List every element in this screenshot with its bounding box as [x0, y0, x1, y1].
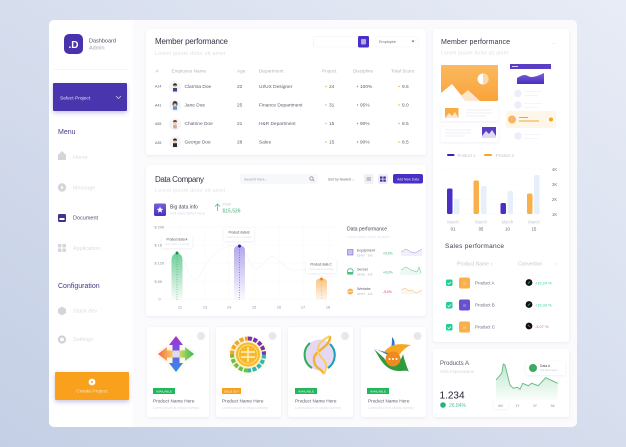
- panel: right column overview: [433, 29, 569, 342]
- menu item: application: [58, 244, 100, 252]
- sort control: Sort by Newest ⌄: [328, 178, 355, 182]
- x axis labels: 13: [203, 306, 207, 310]
- product text: Lorem Ipsum is simply dummy: [295, 406, 341, 410]
- product text: Product Name Here: [222, 398, 264, 404]
- legend: [447, 153, 515, 158]
- y axis labels: $ 20K: [154, 226, 165, 230]
- search input and button: [314, 36, 369, 48]
- big data info: Big data info: [170, 204, 198, 210]
- legend: Product 1: [458, 153, 476, 158]
- brand text: Dashboard: [89, 38, 116, 44]
- product card 4: [361, 327, 426, 417]
- table row: George Doe: George Doe: [184, 140, 211, 146]
- x axis labels: 14: [227, 306, 231, 310]
- sales row: product C: [446, 322, 549, 332]
- value axis: 2K: [552, 197, 557, 202]
- table header: Employee Name: [172, 68, 207, 74]
- heading: menu: Menu: [58, 129, 76, 136]
- bar chart: [443, 167, 557, 232]
- tooltip: product data C: [306, 260, 336, 273]
- x axis labels: [178, 306, 330, 310]
- date labels: 05: [479, 226, 484, 232]
- table row: Jane Doe: 9.0: [402, 102, 409, 108]
- row: website: -5,0%: [383, 290, 392, 294]
- table row: George Doe: 28: [237, 140, 243, 146]
- illustration: list avatars: [514, 90, 542, 140]
- table row: Clarrisa Doe: 24: [329, 84, 335, 90]
- profit stat: $15,526: [222, 209, 241, 215]
- tooltip: product data B: [224, 228, 254, 241]
- table row: Chatrine Doe: 8.5: [402, 121, 409, 127]
- product text: Product Name Here: [153, 398, 195, 404]
- sales row: product C: Product C: [475, 324, 496, 329]
- date labels: March: [475, 220, 487, 224]
- menu item: message: Message: [73, 186, 95, 192]
- table header: Discipline: [353, 68, 373, 74]
- table row: Jane Doe: 95%: [360, 102, 370, 108]
- table row: Clarrisa Doe: UI/UX Designer: [259, 84, 293, 90]
- icon: logo: [64, 34, 83, 54]
- table row: George Doe: 90%: [360, 140, 370, 146]
- row: website: [347, 287, 422, 296]
- tooltip: product data B: Product data B: [228, 230, 250, 234]
- table header: Project: [322, 68, 337, 74]
- y axis labels: $ 8K: [154, 280, 163, 284]
- table row: Chatrine Doe: 15: [329, 121, 335, 127]
- data performance list: [347, 226, 422, 296]
- product text: Lorem Ipsum is simply dummy: [222, 406, 268, 410]
- employee dropdown: Employee: [379, 40, 396, 44]
- sales row: product A: Product A: [475, 281, 495, 286]
- big data info: [154, 204, 205, 216]
- product text: Lorem Ipsum is simply dummy: [368, 406, 414, 410]
- table row: Jane Doe: [155, 100, 409, 112]
- table row: Clarrisa Doe: A14: [155, 84, 161, 88]
- icon: swirl chat: [374, 337, 411, 372]
- date labels: March: [528, 220, 540, 224]
- menu item: home: [58, 151, 88, 161]
- period tabs: [494, 402, 555, 409]
- add new data button: Add New Data: [397, 177, 419, 181]
- table row: Chatrine Doe: [155, 118, 409, 130]
- table row: Clarrisa Doe: [155, 81, 409, 93]
- table row: Jane Doe: Jane Doe: [184, 102, 205, 108]
- subheading: Lorem ipsum dolor sit amet: [155, 188, 225, 194]
- value axis: [552, 167, 557, 217]
- product card 1: [147, 327, 209, 417]
- table header: Department: [259, 68, 284, 74]
- table row: Clarrisa Doe: 22: [237, 84, 243, 90]
- illustration: highlighted list item: [506, 111, 556, 128]
- profit stat: [215, 202, 241, 215]
- y axis labels: $ 12K: [154, 262, 165, 266]
- heading: Member performance: [441, 39, 510, 46]
- profit stat: Profit: [222, 202, 231, 206]
- menu item: home: Home: [73, 155, 88, 161]
- product text: Lorem Ipsum is simply dummy: [153, 406, 199, 410]
- highlight bar: product C: [316, 278, 327, 300]
- create project button: Create Project: [76, 388, 108, 394]
- product text: [153, 398, 199, 410]
- sales table header: [457, 262, 558, 268]
- table row: George Doe: A35: [155, 141, 161, 145]
- heading: Data Company: [155, 175, 204, 184]
- sales row: product B: 02: [463, 304, 466, 308]
- search box: [240, 174, 318, 184]
- sales row: product A: +15,24 %: [535, 280, 552, 286]
- table row: Chatrine Doe: A55: [155, 122, 161, 126]
- main window: [49, 20, 577, 427]
- icon: logo: .D: [68, 40, 78, 51]
- date labels: March: [447, 220, 459, 224]
- list view button: [364, 174, 374, 184]
- employee dropdown: [376, 36, 418, 47]
- panel: data company: [146, 165, 426, 316]
- date labels: 10: [505, 226, 510, 232]
- subheading: Lorem ipsum dolor sit amet: [441, 50, 509, 56]
- menu item: settings: [59, 336, 93, 343]
- status badge: AVAILABLE: [298, 389, 314, 393]
- icon: four-way arrows: [158, 336, 194, 372]
- sales table header: Product Name ↕: [457, 262, 493, 268]
- sales table header: Convertion: [518, 262, 542, 268]
- y axis labels: [154, 226, 165, 302]
- add new data button: [393, 174, 423, 184]
- illustration: purple mini chart: [510, 64, 551, 84]
- table header: Total Score: [391, 68, 415, 74]
- row: website: Website: [357, 287, 371, 291]
- row: equipment: Equipment: [357, 248, 376, 252]
- table header: [156, 68, 415, 74]
- menu item: message: [58, 183, 95, 192]
- menu item: document: Document: [73, 216, 99, 222]
- heading: Member performance: [155, 37, 229, 46]
- panel: member performance table: [146, 29, 426, 155]
- y axis labels: $ 16: [154, 244, 162, 248]
- icon: hexagon emblem: [231, 337, 265, 374]
- menu item: stack dev: [58, 306, 97, 316]
- table row: Jane Doe: 25: [237, 102, 243, 108]
- row: server: +6,0%: [383, 270, 393, 274]
- x axis labels: 12: [178, 306, 182, 310]
- heading: configuration: Configuration: [58, 283, 100, 290]
- table row: George Doe: 15: [329, 140, 335, 146]
- tooltip: product data A: Product data A: [167, 238, 188, 242]
- period tabs: 1Y: [515, 404, 520, 408]
- product card 2: [216, 327, 281, 417]
- table row: Chatrine Doe: 21: [237, 121, 243, 127]
- product card 3: [288, 327, 353, 417]
- product text: [295, 398, 341, 410]
- status badge: AVAILABLE: [156, 389, 172, 393]
- big number: 1.234: [440, 390, 465, 402]
- menu item: application: Application: [73, 246, 100, 252]
- subheading: AVG Impressions: [440, 369, 475, 374]
- table row: Clarrisa Doe: 100%: [360, 84, 373, 90]
- row: server: Server: [357, 268, 369, 272]
- table row: Chatrine Doe: Chatrine Doe: [184, 121, 213, 127]
- tooltip: data A: [526, 361, 565, 375]
- x axis labels: 17: [301, 306, 305, 310]
- table row: George Doe: 8.5: [402, 140, 409, 146]
- period tabs: 2Y: [533, 404, 538, 408]
- product text: [222, 398, 268, 410]
- grid view button: [378, 174, 388, 184]
- tooltip: data A: Data A: [540, 364, 551, 368]
- table row: Clarrisa Doe: Clarrisa Doe: [184, 84, 211, 90]
- tooltip: product data B: Lorem Ipsum is simply: [227, 236, 252, 239]
- status badge: SOLD OUT: [224, 389, 239, 393]
- tooltip: data A: Full description: [540, 368, 558, 372]
- date labels: March: [502, 220, 514, 224]
- row: equipment: $3467 · 345: [357, 254, 373, 258]
- tooltip: product data A: Lorem Ipsum is simply: [165, 243, 190, 246]
- search box: Search here...: [244, 178, 268, 182]
- menu item: stack dev: Stack dev: [73, 308, 97, 314]
- icon: dna helix: [304, 336, 336, 374]
- row: server: $4646 · 345: [357, 272, 373, 276]
- table header: Age: [237, 68, 246, 74]
- table row: Jane Doe: 31: [329, 102, 335, 108]
- table row: Chatrine Doe: H&R Department: [259, 121, 296, 127]
- table row: George Doe: Sales: [259, 140, 272, 146]
- date labels: 15: [532, 226, 537, 232]
- menu item: settings: Settings: [73, 337, 93, 343]
- panel: products A: [433, 349, 569, 417]
- heading: sales performance: Sales performance: [445, 243, 504, 250]
- value axis: 3K: [552, 182, 557, 187]
- legend: Product 2: [496, 153, 515, 158]
- tooltip: product data A: [162, 235, 192, 248]
- illustration: small card one: [441, 106, 498, 121]
- product text: Product Name Here: [295, 398, 337, 404]
- select project button: [53, 83, 127, 111]
- table row: Jane Doe: Finance Department: [259, 102, 303, 108]
- period tabs: All: [551, 404, 555, 408]
- sales table header: ↕: [555, 262, 558, 268]
- y axis labels: 0: [158, 298, 161, 302]
- brand text: [89, 38, 116, 52]
- big data info: Full description here: [170, 210, 205, 216]
- more menu: ...: [552, 40, 556, 46]
- highlight bar: product A: [172, 252, 182, 300]
- x axis labels: 15: [252, 306, 256, 310]
- row: equipment: [348, 248, 422, 258]
- data performance list: Data performance: [347, 226, 387, 232]
- table row: Jane Doe: A41: [155, 104, 161, 108]
- row: server: [348, 267, 421, 276]
- brand text: Admin: [89, 46, 105, 52]
- sales row: product B: Product B: [475, 302, 495, 308]
- sales row: product A: 01: [463, 282, 466, 286]
- sales row: product A: [446, 278, 552, 288]
- product text: Product Name Here: [368, 398, 410, 404]
- line chart: [154, 225, 338, 310]
- row: website: $4567 · 345: [357, 292, 373, 296]
- subheading: Lorem ipsum dolor sit amet: [155, 51, 225, 57]
- x axis labels: 16: [277, 306, 281, 310]
- menu item: document: [58, 214, 99, 222]
- area chart: [496, 364, 558, 400]
- period tabs: 6M: [498, 404, 503, 408]
- highlight bar: product B: [234, 244, 245, 300]
- value axis: 1K: [552, 212, 557, 217]
- product text: [368, 398, 414, 410]
- date labels: 01: [451, 226, 456, 232]
- status badge: AVAILABLE: [370, 389, 386, 393]
- heading: Products A: [440, 361, 469, 367]
- illustration: small card two: [441, 127, 498, 142]
- illustration: orange image card: [441, 65, 498, 101]
- data performance list: Lorem ipsum dolor sit amet: [347, 235, 389, 239]
- date labels: [447, 220, 540, 232]
- create project button: [55, 372, 129, 400]
- sales row: product C: 03: [463, 326, 466, 330]
- value axis: 4K: [552, 167, 557, 172]
- sales row: product C: -3,07 %: [535, 324, 549, 329]
- row: equipment: +5,0%: [383, 252, 393, 256]
- tooltip: product data C: Product data C: [310, 262, 332, 266]
- table header: #: [156, 68, 159, 74]
- table row: George Doe: [155, 136, 409, 148]
- x axis labels: 18: [326, 306, 330, 310]
- panel: sidebar: [49, 20, 133, 427]
- sales row: product B: [446, 300, 552, 310]
- sales row: product B: +15,33 %: [535, 302, 552, 308]
- table row: Clarrisa Doe: 9.5: [402, 84, 409, 90]
- table row: Chatrine Doe: 90%: [360, 121, 370, 127]
- tooltip: product data C: Lorem Ipsum is simply: [309, 268, 334, 271]
- select project button: Select Project: [60, 96, 91, 102]
- growth stat: 26.84%: [449, 403, 467, 409]
